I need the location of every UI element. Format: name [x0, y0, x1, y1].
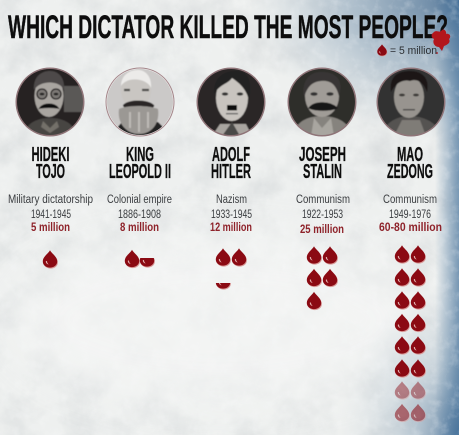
death toll: 5 million: [31, 222, 70, 234]
regime: Military dictatorship: [8, 194, 93, 206]
legend: one drop equals 5 million: [377, 44, 437, 57]
drops: [216, 248, 247, 290]
portrait: King Leopold II: [106, 68, 174, 136]
drops: [307, 246, 338, 310]
column: Hideki Tojo: [8, 144, 93, 269]
regime: Colonial empire: [107, 194, 172, 206]
column: Joseph Stalin: [296, 144, 350, 310]
name: JOSEPH: [299, 144, 346, 166]
portrait: Joseph Stalin: [288, 68, 356, 136]
name: ADOLF: [212, 144, 250, 166]
regime: Communism: [296, 194, 350, 206]
column: Mao Zedong: [379, 144, 442, 422]
death toll: 8 million: [120, 222, 159, 234]
death toll: 25 million: [300, 224, 344, 236]
name: MAO: [397, 144, 423, 166]
regime: Nazism: [216, 194, 247, 206]
name: KING: [126, 144, 154, 166]
name: STALIN: [303, 161, 342, 183]
blood splatter: [432, 29, 450, 54]
years: 1949-1976: [389, 209, 431, 221]
legend text: = 5 million: [390, 45, 437, 57]
name: HIDEKI: [32, 144, 70, 166]
column: Adolf Hitler: [210, 144, 252, 290]
years: 1922-1953: [302, 209, 343, 221]
icon: legend drop: [377, 44, 387, 56]
portrait: Hideki Tojo: [15, 67, 86, 140]
regime: Communism: [383, 194, 437, 206]
drops: [395, 245, 426, 422]
column: King Leopold II: [107, 144, 172, 268]
name: LEOPOLD II: [109, 161, 171, 183]
name: TOJO: [36, 161, 65, 183]
years: 1886-1908: [118, 209, 161, 221]
death toll: 12 million: [210, 222, 252, 234]
years: 1941-1945: [31, 209, 71, 221]
name: HITLER: [211, 161, 251, 183]
portrait: Adolf Hitler: [196, 68, 266, 136]
drops: [43, 250, 58, 269]
portrait: Mao Zedong: [376, 68, 446, 136]
years: 1933-1945: [211, 209, 252, 221]
drops: [125, 249, 155, 268]
death toll: 60-80 million: [379, 222, 442, 234]
